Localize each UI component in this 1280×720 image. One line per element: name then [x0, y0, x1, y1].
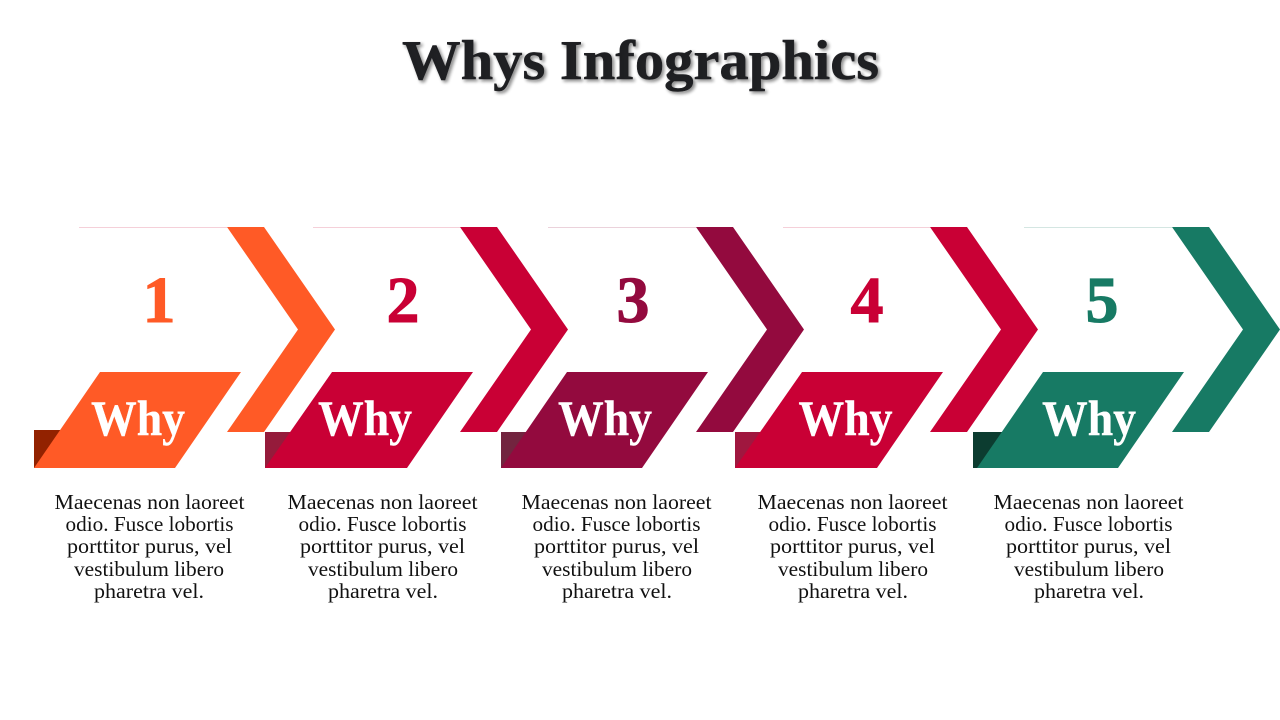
- description 1: porttitor purus, vel: [67, 534, 232, 558]
- why tab 3: [501, 372, 708, 468]
- description 3: vestibulum libero: [542, 557, 692, 581]
- description 1: pharetra vel.: [94, 579, 204, 603]
- why tab 5: [977, 372, 1184, 468]
- description 3: porttitor purus, vel: [534, 534, 699, 558]
- fold corner 3: [501, 432, 531, 468]
- description 4: Maecenas non laoreet: [758, 490, 948, 514]
- description 3: [522, 490, 712, 603]
- chevron arrow 5: [1172, 227, 1280, 432]
- fold corner 4: [735, 432, 765, 468]
- number 2: 2: [386, 264, 420, 337]
- description 4: porttitor purus, vel: [770, 534, 935, 558]
- description 3: pharetra vel.: [562, 579, 672, 603]
- why tab 1: [34, 372, 241, 468]
- description 1: Maecenas non laoreet: [54, 490, 245, 514]
- why label 5: Why: [1042, 390, 1136, 446]
- number 5: 5: [1086, 264, 1118, 337]
- description 1: [54, 490, 245, 603]
- description 2: [288, 490, 478, 603]
- chevron arrow 2: [460, 227, 568, 432]
- panel: step 5: [973, 227, 1280, 603]
- why tab 4: [735, 372, 943, 468]
- number 1: 1: [142, 264, 176, 337]
- description 1: odio. Fusce lobortis: [66, 512, 234, 536]
- panel: step 4: [735, 227, 1038, 603]
- number 4: 4: [850, 264, 884, 337]
- panel: step 2: [265, 227, 568, 603]
- description 5: pharetra vel.: [1034, 579, 1144, 603]
- panel: step 1: [34, 227, 335, 603]
- description 2: Maecenas non laoreet: [288, 490, 478, 514]
- why tab 2: [265, 372, 473, 468]
- chevron arrow 4: [930, 227, 1038, 432]
- description 5: odio. Fusce lobortis: [1004, 512, 1172, 536]
- description 1: vestibulum libero: [74, 557, 224, 581]
- description 5: porttitor purus, vel: [1006, 534, 1171, 558]
- why label 1: Why: [91, 390, 185, 446]
- number 3: 3: [616, 264, 650, 337]
- title: Whys Infographics: [402, 30, 879, 92]
- description 5: vestibulum libero: [1014, 557, 1164, 581]
- description 4: vestibulum libero: [778, 557, 928, 581]
- description 3: Maecenas non laoreet: [522, 490, 712, 514]
- description 2: pharetra vel.: [328, 579, 438, 603]
- fold corner 1: [34, 430, 64, 468]
- chevron arrow 1: [227, 227, 335, 432]
- description 5: Maecenas non laoreet: [994, 490, 1184, 514]
- description 4: odio. Fusce lobortis: [768, 512, 936, 536]
- description 4: [758, 490, 948, 603]
- panel: step 3: [501, 227, 804, 603]
- description 2: vestibulum libero: [308, 557, 458, 581]
- why label 2: Why: [318, 390, 412, 446]
- chevron arrow 3: [696, 227, 804, 432]
- why label 3: Why: [558, 390, 652, 446]
- fold corner 2: [265, 432, 295, 468]
- description 2: porttitor purus, vel: [300, 534, 465, 558]
- description 3: odio. Fusce lobortis: [532, 512, 700, 536]
- fold corner 5: [973, 432, 1005, 468]
- why label 4: Why: [798, 390, 892, 446]
- description 4: pharetra vel.: [798, 579, 908, 603]
- description 2: odio. Fusce lobortis: [298, 512, 466, 536]
- description 5: [994, 490, 1184, 603]
